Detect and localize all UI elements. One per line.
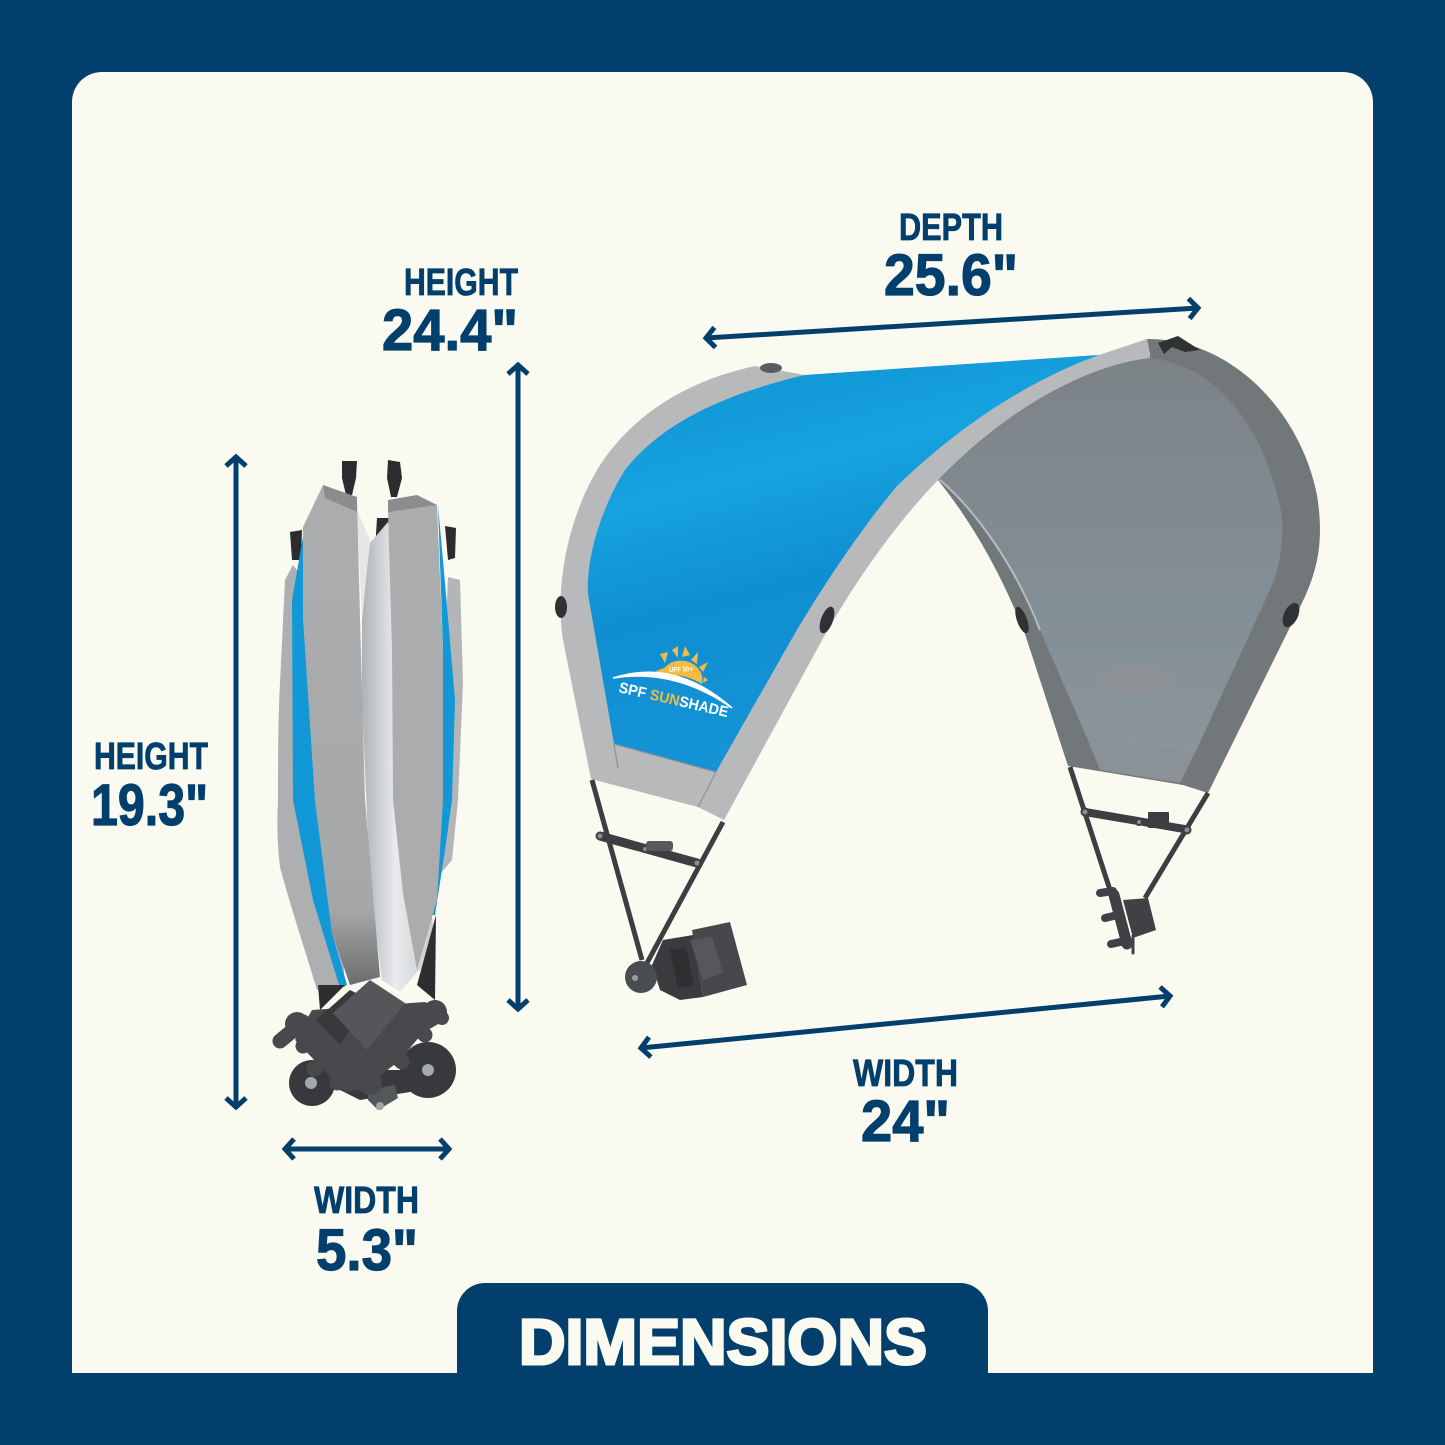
folded silver flap bbox=[357, 510, 370, 620]
left strut frame bbox=[592, 780, 723, 963]
label: folded width: 5.3" bbox=[316, 1218, 418, 1283]
fittings top bbox=[290, 460, 456, 560]
label: folded width bbox=[314, 1180, 419, 1283]
label: open width: 24" bbox=[861, 1089, 950, 1154]
folded gray panel left bbox=[303, 485, 380, 985]
logo: SPF SunShade: SPF SUNSHADE bbox=[617, 679, 730, 721]
label: folded height bbox=[91, 736, 208, 838]
inner highlight and stain bbox=[940, 480, 1173, 696]
clamp top block bbox=[333, 980, 405, 1050]
clamp rear block bbox=[316, 990, 370, 1045]
canopy inner fabric bbox=[938, 358, 1282, 753]
label: folded height: 19.3" bbox=[91, 773, 208, 838]
folded blue strip right bbox=[430, 505, 455, 915]
label: depth bbox=[884, 207, 1018, 308]
arrow: folded width bbox=[285, 1146, 449, 1152]
arrow: depth bbox=[706, 308, 1198, 338]
label: open height: HEIGHT bbox=[404, 262, 518, 304]
label: open width bbox=[853, 1053, 958, 1154]
arrow: folded height bbox=[234, 457, 238, 1107]
title tab: dimensions: DIMENSIONS bbox=[519, 1306, 927, 1378]
logo: SPF SunShade bbox=[613, 646, 732, 721]
title tab: dimensions bbox=[457, 1283, 988, 1378]
label: depth: 25.6" bbox=[884, 243, 1018, 308]
folded strut plates bbox=[318, 915, 436, 1010]
right clamp bbox=[1100, 891, 1156, 953]
label: folded height: HEIGHT bbox=[94, 736, 208, 778]
folded back gray panel right bbox=[435, 577, 463, 880]
collars bbox=[323, 485, 437, 512]
folded back gray panel left bbox=[277, 565, 345, 990]
canopy light gray band bbox=[561, 339, 1150, 820]
label: open height: 24.4" bbox=[382, 298, 518, 363]
label: open height bbox=[382, 262, 518, 363]
label: folded width: WIDTH bbox=[314, 1180, 419, 1222]
label: open width: WIDTH bbox=[853, 1053, 958, 1095]
logo: SPF SunShade: UPF 50+ bbox=[669, 666, 693, 674]
canopy blue top bbox=[588, 355, 1099, 772]
arrow: open width bbox=[641, 996, 1170, 1048]
folded blue strip left bbox=[292, 525, 347, 988]
label: depth: DEPTH bbox=[899, 207, 1003, 249]
canopy fittings bbox=[555, 336, 1303, 635]
product: open canopy bbox=[555, 336, 1320, 1000]
canopy inner dark band bbox=[938, 339, 1320, 793]
clamp wheels bbox=[289, 1042, 456, 1110]
clamp combs bbox=[280, 1002, 442, 1092]
arrow: open height bbox=[516, 365, 520, 1009]
folded gray panel right bbox=[388, 498, 443, 970]
folded silver fabric bbox=[362, 522, 436, 992]
left clamp with wheel bbox=[625, 922, 747, 1000]
hem stitching bbox=[614, 744, 716, 807]
canopy inner hem bbox=[1087, 738, 1195, 783]
product: folded canopy bbox=[277, 460, 463, 1110]
right strut frame bbox=[1070, 767, 1208, 898]
